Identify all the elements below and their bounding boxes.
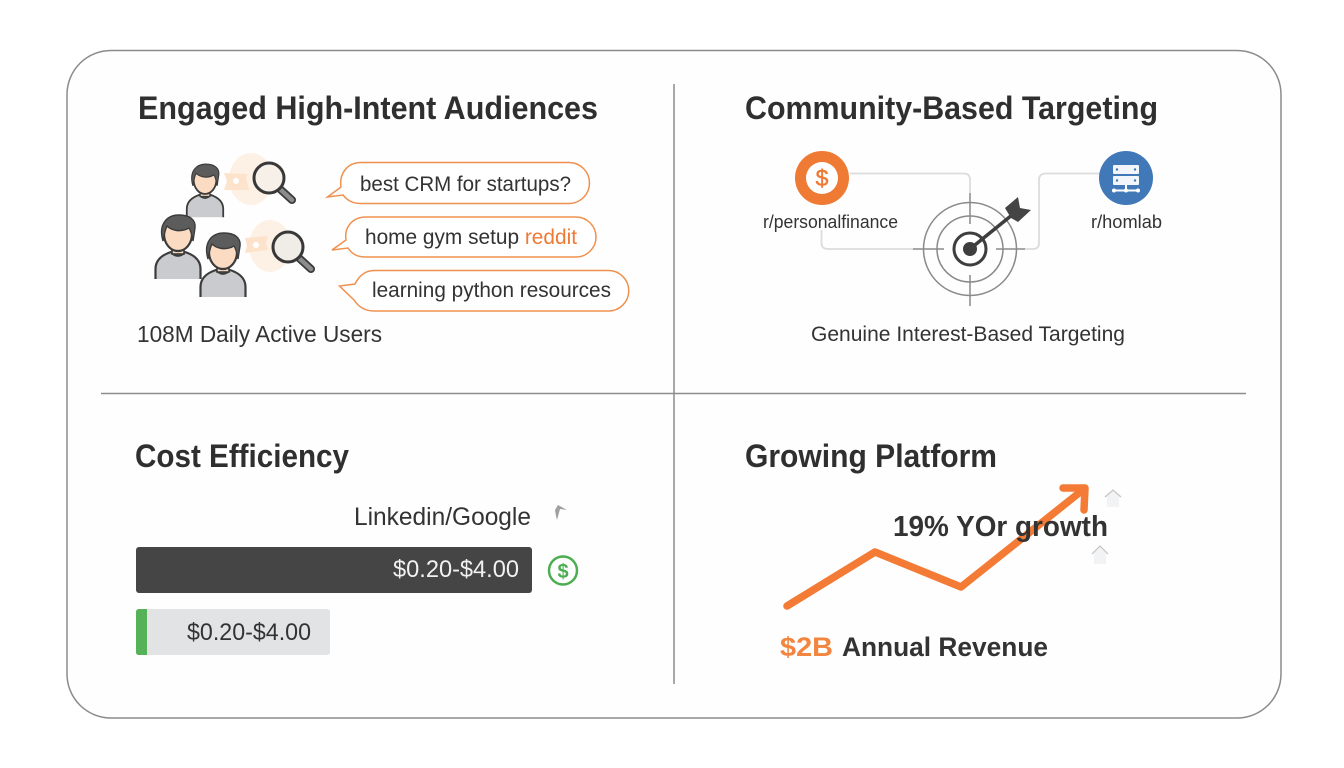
heading: engaged audiences: Engaged High-Intent Audiences xyxy=(138,90,598,126)
speech bubble: learning python xyxy=(340,270,629,311)
heading: growing platform: Growing Platform xyxy=(745,438,997,474)
speech bubble: learning python: learning python resources xyxy=(372,279,611,302)
stat: annual revenue: Annual Revenue xyxy=(842,632,1048,662)
heading: community targeting: Community-Based Targeting xyxy=(745,90,1158,126)
bar: reddit cost xyxy=(136,609,330,655)
speech bubble: best CRM: best CRM for startups? xyxy=(360,173,571,196)
speech bubble: home gym xyxy=(332,217,596,257)
caption: interest-based targeting: Genuine Interest-Based Targeting xyxy=(811,323,1125,346)
chart: growth arrow xyxy=(787,488,1085,606)
label: r/homlab: r/homlab xyxy=(1091,212,1162,232)
bar: reddit cost: $0.20-$4.00 xyxy=(187,619,311,646)
icon: server community xyxy=(1099,151,1153,205)
icon: target with dart xyxy=(913,193,1031,306)
speech bubble: best CRM xyxy=(328,162,589,204)
panel: engaged high-intent audiences xyxy=(137,90,629,347)
label: linkedin/google: Linkedin/Google xyxy=(354,503,531,531)
icon: dollar community: $ xyxy=(816,165,829,191)
stat: annual revenue: $2B xyxy=(780,632,833,662)
outer card xyxy=(67,50,1281,718)
connector lines xyxy=(822,174,1100,249)
stat: YoY growth: 19% YOr growth xyxy=(893,511,1108,543)
icon: green dollar xyxy=(549,556,577,584)
label: r/personalfinance: r/personalfinance xyxy=(763,212,898,232)
icon: green dollar: $ xyxy=(557,561,569,583)
icon: small cursor mark xyxy=(555,505,567,520)
bar: linkedin/google cost: $0.20-$4.00 xyxy=(393,556,519,583)
panel: community-based targeting xyxy=(745,90,1162,346)
panel: growing platform xyxy=(745,438,1121,662)
stat: daily active users: 108M Daily Active Users xyxy=(137,321,382,347)
icon: dollar community xyxy=(795,151,849,205)
icon: people searching xyxy=(155,153,311,297)
panel: cost efficiency xyxy=(135,438,577,655)
bar: linkedin/google cost xyxy=(136,547,532,593)
heading: cost efficiency: Cost Efficiency xyxy=(135,438,349,474)
speech bubble: home gym: home gym setup reddit xyxy=(365,226,577,249)
icon: faint up arrows xyxy=(1092,490,1121,564)
